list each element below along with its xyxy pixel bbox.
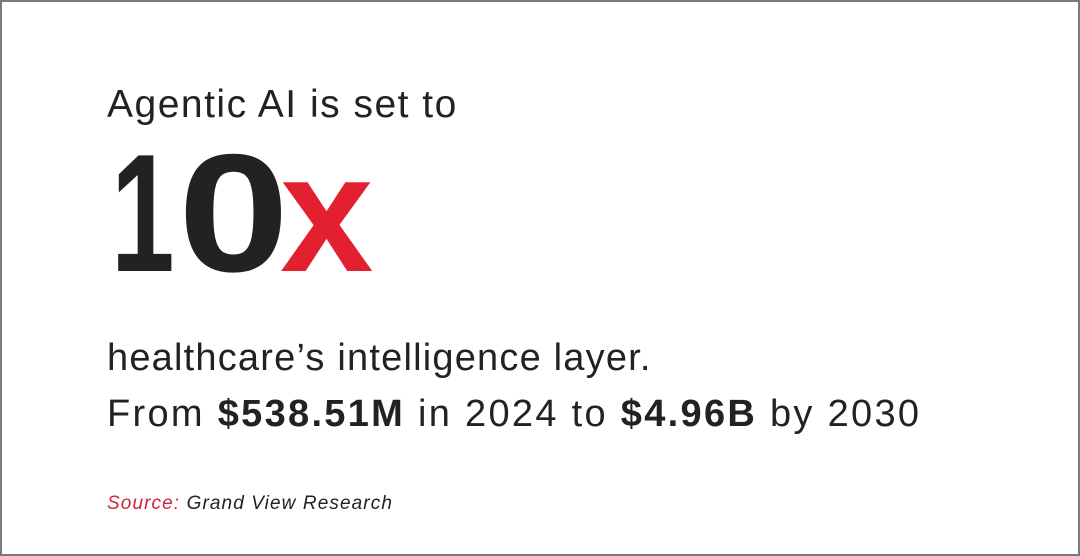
text block: description	[107, 337, 921, 435]
source note: Source: Grand View Research	[107, 493, 393, 514]
heading: intro: Agentic AI is set to	[107, 83, 458, 126]
text block: description: healthcare’s intelligence layer.	[107, 337, 652, 379]
headline number: 10x	[111, 119, 373, 307]
headline number: 10x: x	[280, 119, 373, 307]
text block: description: From $538.51M in 2024 to $4.96B by 2030	[107, 393, 921, 435]
headline number: 10x: 1	[111, 119, 175, 307]
headline number: 10x: 0	[178, 119, 289, 307]
